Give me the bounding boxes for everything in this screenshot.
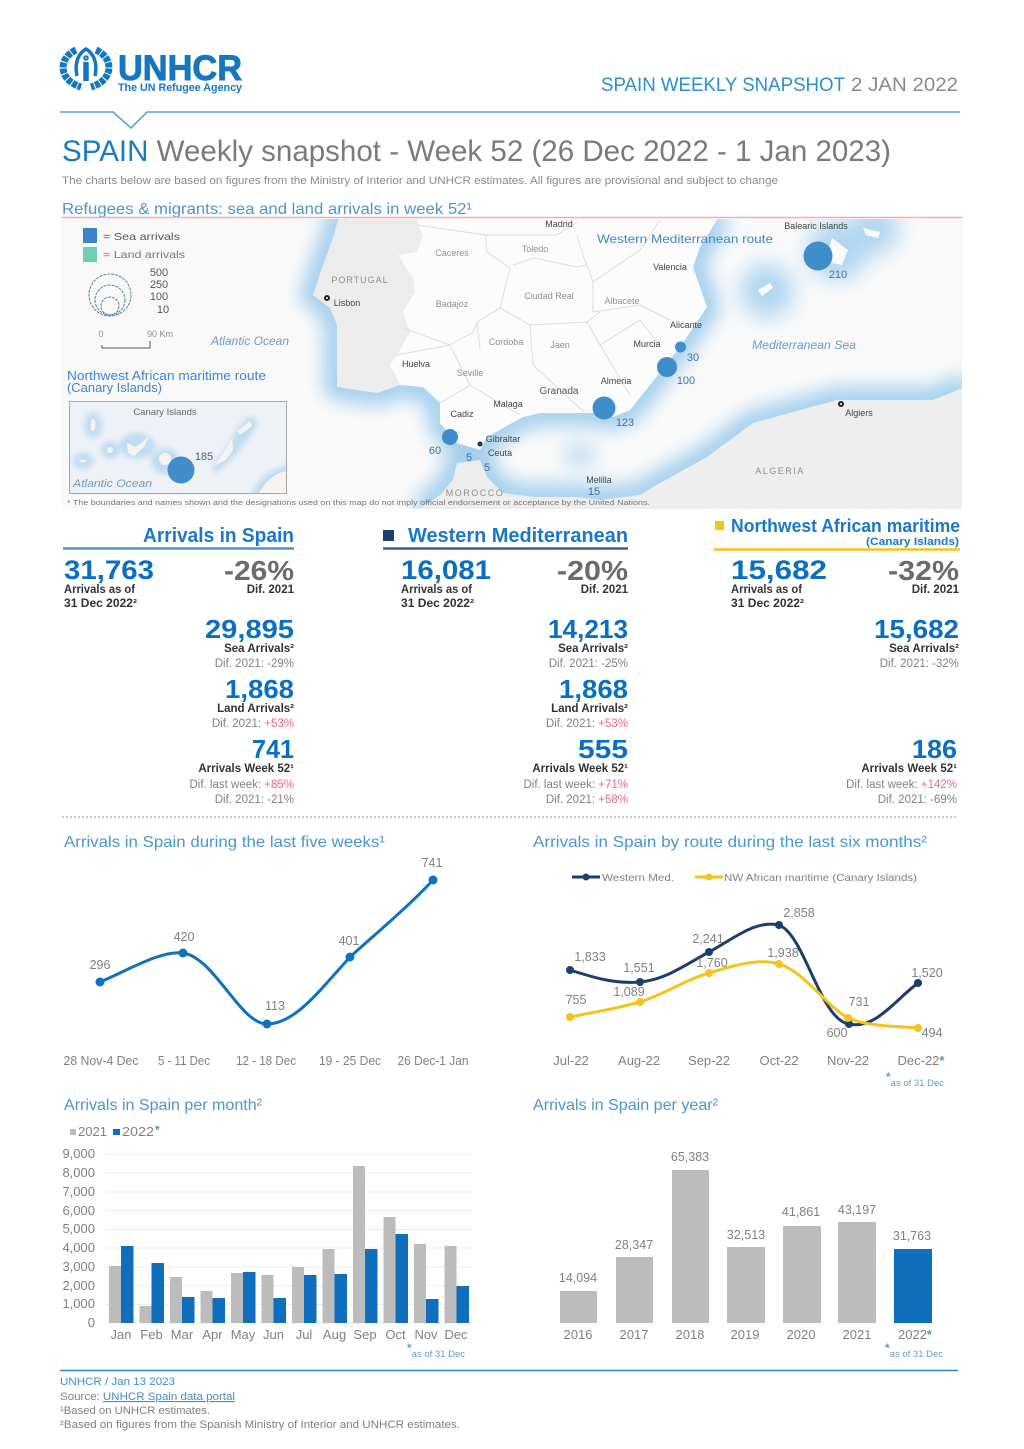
values: 600	[827, 1026, 847, 1040]
panel: Western Mediterranean: Sea Arrivals²	[558, 643, 628, 655]
land: Morocco and Algeria	[420, 385, 970, 515]
values: 401	[339, 934, 359, 948]
values: 32,513	[727, 1228, 765, 1242]
panel: arrivals in Spain	[63, 525, 295, 806]
y axis: 8,000	[62, 1165, 95, 1180]
place names: Ciudad Real	[524, 291, 574, 301]
legend	[70, 1123, 160, 1139]
map legend	[83, 228, 185, 348]
panel: arrivals in Spain: 31 Dec 2022²	[64, 598, 137, 610]
date credit: UNHCR / Jan 13 2023	[60, 1376, 175, 1388]
month labels: Nov-22	[827, 1053, 869, 1068]
subtitle: The charts below are based on figures from the Ministry of Interior and UNHCR estimates. All figures are provisional and subject to change	[62, 175, 778, 187]
panel: Western Mediterranean: Arrivals Week 52¹	[532, 763, 628, 775]
sea arrivals: 29,895	[205, 614, 294, 644]
heading: Northwest African maritime	[731, 516, 960, 536]
place names: Algiers	[845, 408, 873, 418]
panel: arrivals in Spain: Dif. 2021: -21%	[215, 794, 294, 806]
arrival values: 30	[687, 352, 699, 364]
inset map: Canary Islands	[70, 402, 292, 500]
month labels: Feb	[140, 1327, 163, 1342]
map legend: 90 Km	[147, 329, 173, 339]
y axis: 2,000	[62, 1278, 95, 1293]
arrival values: 5	[484, 462, 490, 474]
map legend: = Land arrivals	[103, 249, 185, 261]
tagline: The UN Refugee Agency	[118, 82, 243, 94]
month labels: May	[231, 1327, 256, 1342]
year labels: 2019	[731, 1327, 759, 1342]
arrival values: 100	[677, 375, 695, 387]
note 2: ²Based on figures from the Spanish Ministry of Interior and UNHCR estimates.	[60, 1419, 460, 1431]
place names: Albacete	[604, 296, 640, 306]
panel: Northwest African maritime: Dif. 2021	[912, 584, 960, 596]
week labels: 12 - 18 Dec	[236, 1054, 296, 1068]
map legend: 10	[157, 304, 169, 316]
note: as of 31 Dec	[412, 1349, 465, 1360]
panel: Northwest African maritime: Sea Arrivals²	[889, 643, 959, 655]
month labels: Jun	[263, 1327, 284, 1342]
month labels: Oct-22	[759, 1053, 799, 1068]
islands	[758, 228, 880, 296]
values: 1,551	[623, 961, 655, 975]
panel: Western Mediterranean	[383, 525, 629, 806]
map legend: 500	[150, 267, 168, 279]
chart: by route, last six months	[533, 834, 945, 1089]
footer	[60, 1370, 958, 1431]
place names: Western Mediterranean route	[597, 232, 773, 246]
place names: Madrid	[545, 219, 573, 229]
panel: Northwest African maritime: Dif. 2021: -32%	[880, 658, 959, 670]
chart heading: Arrivals in Spain during the last five weeks¹	[64, 834, 385, 851]
month labels	[111, 1327, 468, 1342]
place names: Gibraltar	[486, 434, 520, 444]
note: *	[885, 1341, 890, 1355]
grid	[105, 1154, 472, 1323]
values: 28,347	[615, 1238, 653, 1252]
place names: Ceuta	[488, 448, 512, 458]
note: as of 31 Dec	[891, 1078, 944, 1089]
values: 65,383	[671, 1150, 709, 1164]
weekly arrivals: 741	[252, 734, 294, 764]
total arrivals: 15,682	[731, 555, 827, 585]
panel: Western Mediterranean: Dif. last week: +71%	[523, 779, 628, 791]
inset map: Canary Islands: 185	[195, 451, 213, 463]
chart: per month	[62, 1097, 472, 1360]
year labels: 2022*	[898, 1327, 933, 1342]
place names: Cadiz	[450, 409, 474, 419]
change vs 2021: -20%	[557, 555, 628, 586]
bars 2021	[109, 1166, 456, 1323]
y axis: 6,000	[62, 1203, 95, 1218]
place names: Almeria	[601, 376, 631, 386]
panel: Western Mediterranean: 31 Dec 2022²	[401, 598, 474, 610]
total arrivals: 31,763	[64, 555, 154, 585]
panel: arrivals in Spain: Arrivals Week 52¹	[198, 763, 294, 775]
bars 2022	[121, 1234, 469, 1323]
y axis: 9,000	[62, 1146, 95, 1161]
values: 741	[422, 856, 442, 870]
sea arrivals: 14,213	[548, 614, 628, 644]
place names: Alicante	[670, 320, 702, 330]
sea arrivals swatch	[83, 228, 97, 243]
arrival values	[429, 269, 847, 498]
week labels: 5 - 11 Dec	[158, 1054, 210, 1068]
values: 2,241	[692, 932, 724, 946]
place names: PORTUGAL	[331, 275, 389, 285]
legend: NW African maritime (Canary Islands)	[724, 872, 917, 884]
month labels	[553, 1053, 945, 1068]
month labels: Aug-22	[618, 1053, 660, 1068]
values: 420	[174, 930, 194, 944]
heading: Western Mediterranean	[408, 525, 628, 547]
place names: Lisbon	[334, 298, 360, 308]
heading: Arrivals in Spain	[143, 525, 294, 547]
place names: Cordoba	[489, 337, 523, 347]
month labels: Sep	[353, 1327, 377, 1342]
legend: 2021	[78, 1125, 107, 1139]
values: 43,197	[838, 1203, 876, 1217]
week labels	[64, 1054, 469, 1068]
month labels: Jan	[111, 1327, 131, 1342]
values: 1,520	[911, 966, 943, 980]
note 1: ¹Based on UNHCR estimates.	[60, 1405, 210, 1417]
values: 14,094	[559, 1271, 597, 1285]
bars	[560, 1170, 876, 1323]
chart heading: Arrivals in Spain per month²	[64, 1097, 263, 1114]
year labels: 2016	[564, 1327, 592, 1342]
header label: SPAIN WEEKLY SNAPSHOT	[601, 75, 845, 96]
sea arrivals: 15,682	[874, 614, 959, 644]
note: *	[407, 1341, 412, 1355]
icon: navy square	[383, 530, 394, 541]
title: SPAIN Weekly snapshot - Week 52 (26 Dec 2022 - 1 Jan 2023)	[62, 135, 891, 168]
place names: Melilla	[586, 475, 612, 485]
legend: Western Med.	[602, 872, 674, 884]
month labels: Oct	[385, 1327, 406, 1342]
week labels: 28 Nov-4 Dec	[64, 1054, 138, 1068]
legend: *	[155, 1123, 160, 1137]
panel: arrivals map	[62, 205, 970, 515]
panel: arrivals in Spain: Dif. 2021: +53%	[212, 718, 294, 730]
proportional symbols	[89, 274, 131, 316]
panel: arrivals in Spain: Dif. 2021: -29%	[215, 658, 294, 670]
y axis	[62, 1146, 95, 1330]
values: 755	[566, 993, 586, 1007]
week labels: 26 Dec-1 Jan	[398, 1054, 469, 1068]
line: NW African	[570, 962, 918, 1028]
chart: per year	[533, 1097, 943, 1360]
chart heading: Arrivals in Spain per year²	[533, 1097, 719, 1114]
source: Source: UNHCR Spain data portal	[60, 1391, 235, 1403]
place names: Mediterranean Sea	[752, 338, 856, 352]
panel: arrivals in Spain: Land Arrivals²	[217, 703, 294, 715]
map disclaimer: * The boundaries and names shown and the designations used on this map do not imply official endorsement or acceptance by the United Nations.	[67, 500, 650, 507]
inset map: Canary Islands: Canary Islands	[133, 407, 197, 418]
map legend: 100	[150, 291, 168, 303]
panel: arrivals map: (Canary Islands)	[67, 381, 162, 395]
month labels: Apr	[202, 1327, 223, 1342]
place names: Caceres	[435, 248, 469, 258]
arrival values: 123	[616, 417, 634, 429]
city markers	[325, 296, 843, 446]
total arrivals: 16,081	[401, 555, 491, 585]
weekly arrivals: 555	[578, 734, 628, 764]
logo: UNHCR	[63, 49, 243, 94]
values: 494	[922, 1026, 942, 1040]
scale bar	[102, 341, 150, 348]
legend	[572, 872, 917, 884]
province borders	[397, 220, 670, 415]
place names: Toledo	[522, 244, 548, 254]
month labels: Nov	[414, 1327, 438, 1342]
values: 731	[849, 995, 869, 1009]
month labels: Aug	[323, 1327, 346, 1342]
note: *	[886, 1070, 891, 1084]
wordmark: UNHCR	[118, 49, 242, 88]
header rule with notch	[60, 112, 960, 128]
chart: last five weeks	[64, 834, 469, 1068]
line	[100, 880, 433, 1024]
header label: 2 JAN 2022	[851, 75, 958, 96]
month labels: Jul-22	[553, 1053, 589, 1068]
change vs 2021: -26%	[224, 555, 294, 586]
arrival values: 210	[829, 269, 847, 281]
place names: Malaga	[493, 399, 523, 409]
panel: Western Mediterranean: Dif. 2021	[581, 584, 629, 596]
y axis: 3,000	[62, 1259, 95, 1274]
arrival bubbles	[442, 242, 832, 445]
values: 1,089	[613, 985, 645, 999]
values	[559, 1150, 931, 1285]
map legend: 0	[98, 329, 104, 339]
month labels: Dec-22*	[898, 1053, 945, 1068]
map top rule	[62, 216, 962, 218]
values: 296	[90, 958, 110, 972]
place names: Badajoz	[436, 299, 469, 309]
place names: Valencia	[653, 262, 687, 272]
arrival values: 15	[588, 486, 600, 498]
values: 1,938	[767, 946, 799, 960]
values: 2,858	[783, 906, 815, 920]
month labels: Jul	[296, 1327, 312, 1342]
icon: wreath and sheltering hands	[63, 49, 109, 87]
legend: 2022	[122, 1125, 154, 1139]
month labels: Dec	[444, 1327, 468, 1342]
panel: Northwest African maritime	[714, 516, 960, 806]
year labels: 2017	[620, 1327, 648, 1342]
values: 41,861	[782, 1205, 820, 1219]
land arrivals: 1,868	[559, 674, 628, 704]
panel: Northwest African maritime: Arrivals as of	[731, 584, 802, 596]
map heading: Refugees & migrants: sea and land arrivals in week 52¹	[62, 201, 472, 218]
panel: arrivals in Spain: Dif. 2021	[247, 584, 295, 596]
land: Spain	[390, 205, 722, 450]
month labels: Mar	[171, 1327, 194, 1342]
place names: ALGERIA	[755, 466, 805, 476]
panel: arrivals in Spain: Arrivals as of	[64, 584, 135, 596]
route label: Canary Islands: Northwest African maritime route	[67, 369, 266, 383]
panel: Western Mediterranean: Land Arrivals²	[551, 703, 628, 715]
y axis: 0	[88, 1315, 95, 1330]
chart heading: Arrivals in Spain by route during the last six months²	[533, 834, 928, 851]
map legend: 250	[150, 279, 168, 291]
year labels: 2020	[787, 1327, 815, 1342]
place names: MOROCCO	[446, 488, 504, 498]
values: 113	[265, 999, 285, 1013]
place names: Seville	[457, 368, 483, 378]
y axis: 1,000	[62, 1296, 95, 1311]
year labels	[564, 1327, 933, 1342]
panel: Western Mediterranean: Dif. 2021: -25%	[549, 658, 628, 670]
panel: Western Mediterranean: Arrivals as of	[401, 584, 472, 596]
panel: Western Mediterranean: Dif. 2021: +58%	[546, 794, 628, 806]
inset map: Canary Islands: Atlantic Ocean	[72, 478, 152, 490]
icon: yellow square	[715, 521, 724, 530]
change vs 2021: -32%	[888, 555, 959, 586]
panel: Northwest African maritime: Dif. last week: +142%	[846, 779, 957, 791]
bubble: Canary Islands	[168, 456, 194, 484]
place names: Murcia	[633, 339, 661, 349]
place names: Balearic Islands	[784, 221, 848, 231]
land arrivals swatch	[83, 247, 97, 262]
note: as of 31 Dec	[890, 1349, 943, 1360]
panel: Northwest African maritime: (Canary Islands)	[866, 536, 959, 548]
place names	[210, 219, 873, 498]
panel: Northwest African maritime: Arrivals Week 52¹	[861, 763, 957, 775]
line: Western Med	[570, 924, 918, 1025]
y axis: 5,000	[62, 1221, 95, 1236]
arrival values: 60	[429, 445, 441, 457]
y axis: 4,000	[62, 1240, 95, 1255]
land arrivals: 1,868	[225, 674, 294, 704]
panel: Northwest African maritime: 31 Dec 2022²	[731, 598, 804, 610]
values	[566, 906, 943, 1040]
header label	[601, 75, 958, 96]
place names: Huelva	[402, 359, 430, 369]
panel: Northwest African maritime: Dif. 2021: -69%	[878, 794, 957, 806]
values: 1,760	[696, 956, 728, 970]
panel: arrivals in Spain: Dif. last week: +85%	[189, 779, 294, 791]
panel: arrivals in Spain: Sea Arrivals²	[224, 643, 294, 655]
arrival values: 5	[466, 452, 472, 464]
values: 31,763	[893, 1229, 931, 1243]
values	[90, 856, 442, 1013]
y axis: 7,000	[62, 1184, 95, 1199]
place names: Granada	[540, 386, 579, 397]
year labels: 2021	[843, 1327, 871, 1342]
month labels: Sep-22	[688, 1053, 730, 1068]
place names: Atlantic Ocean	[210, 334, 289, 348]
place names: Jaen	[550, 340, 570, 350]
panel: Western Mediterranean: Dif. 2021: +53%	[546, 718, 628, 730]
map legend: = Sea arrivals	[103, 231, 180, 243]
year labels: 2018	[676, 1327, 704, 1342]
weekly arrivals: 186	[912, 734, 957, 764]
land: Portugal	[313, 205, 423, 393]
values: 1,833	[574, 950, 606, 964]
week labels: 19 - 25 Dec	[319, 1054, 381, 1068]
